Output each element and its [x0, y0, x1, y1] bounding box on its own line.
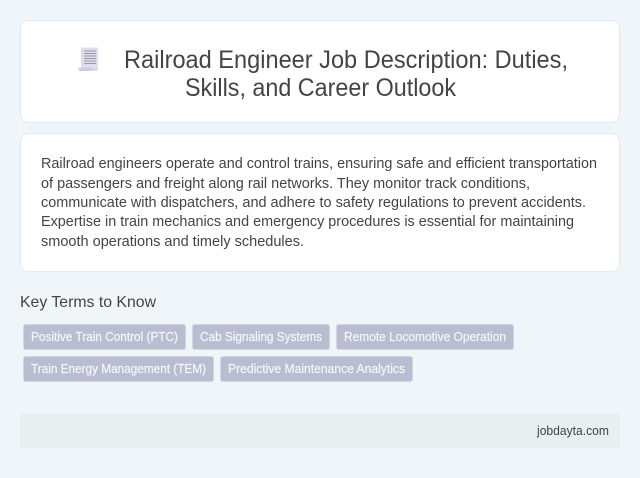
- chip: Remote Locomotive Operation: [336, 324, 514, 350]
- chip: Positive Train Control: Positive Train Control (PTC): [31, 330, 178, 344]
- description text: Expertise in train mechanics and emergency procedures is essential for maintaining: [41, 214, 574, 230]
- description text: smooth operations and timely schedules.: [41, 234, 304, 250]
- icon: document scroll: [78, 48, 98, 71]
- description text: communicate with dispatchers, and adhere to safety regulations to prevent accidents.: [41, 195, 586, 211]
- chip: Train Energy Management: Train Energy Management (TEM): [31, 362, 206, 376]
- description text: [41, 156, 597, 250]
- chip: Remote Locomotive Operation: Remote Locomotive Operation: [344, 330, 506, 344]
- chip: Cab Signaling Systems: [192, 324, 330, 350]
- title: Skills, and Career Outlook: [185, 74, 456, 102]
- title: Railroad Engineer Job Description: Duties,: [124, 46, 568, 74]
- chip: Cab Signaling Systems: Cab Signaling Systems: [200, 330, 322, 344]
- title: [124, 46, 568, 102]
- heading: key terms: Key Terms to Know: [20, 294, 156, 311]
- panel: title card: [20, 20, 620, 122]
- chip: Train Energy Management: [24, 356, 214, 382]
- chip: Predictive Maintenance Analytics: [220, 356, 412, 382]
- description text: Railroad engineers operate and control trains, ensuring safe and efficient transportation: [41, 156, 597, 172]
- panel: description card: [20, 134, 620, 272]
- footer bar: jobdayta.com: [536, 424, 609, 438]
- description text: of passengers and freight along rail networks. They monitor track conditions,: [41, 176, 530, 192]
- chip: Predictive Maintenance Analytics: Predictive Maintenance Analytics: [228, 362, 405, 376]
- key terms chips: [24, 324, 514, 382]
- chip: Positive Train Control: [24, 324, 186, 350]
- footer bar: [20, 414, 620, 448]
